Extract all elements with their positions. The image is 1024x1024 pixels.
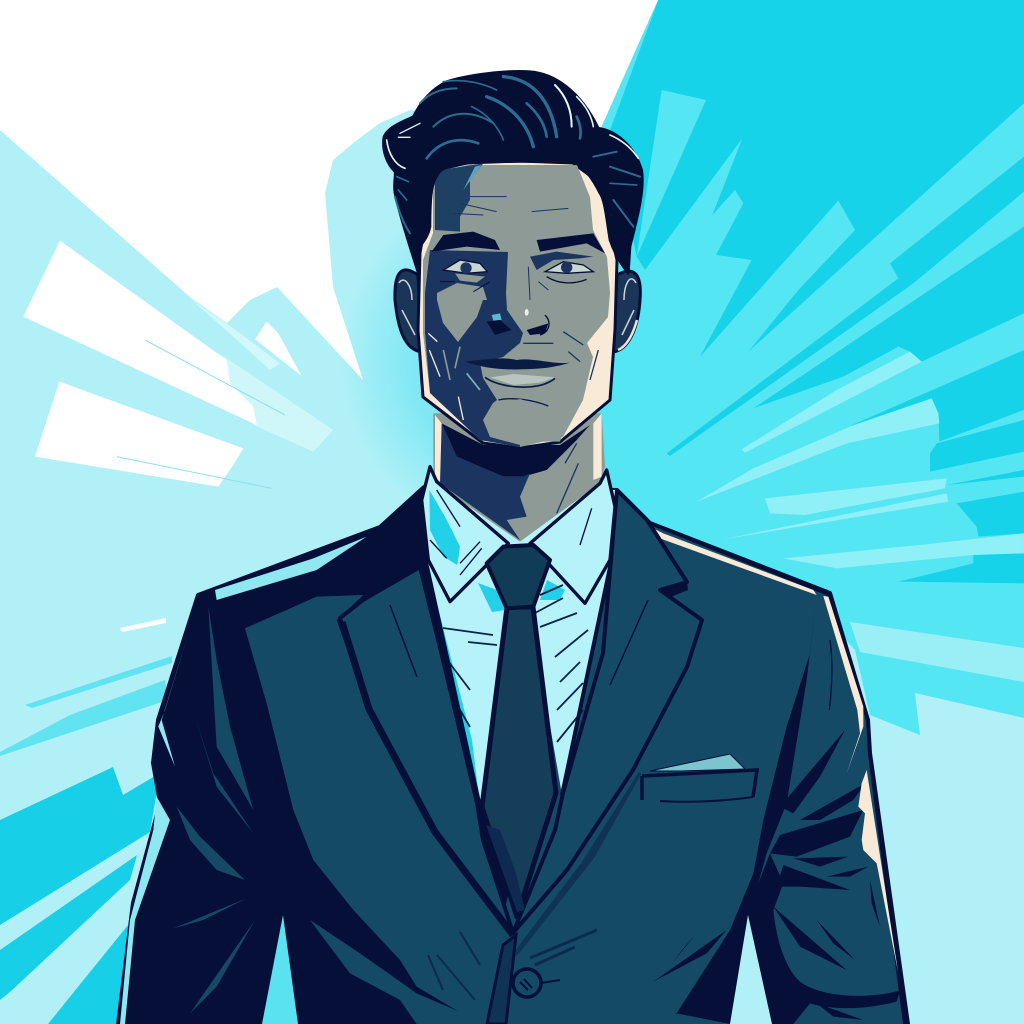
neck [433,413,605,542]
jacket front creases right [530,930,597,965]
face: forehead shadow [435,163,483,232]
right sleeve seam and folds [653,597,900,1024]
background: pale streaks, right [697,352,1024,568]
background: pale band lower right [850,622,1024,682]
lower left strip [310,920,467,1024]
cheek lines [523,332,598,380]
face: left navy shadow [425,250,523,447]
right lapel lower shadow [510,773,640,960]
right lapel notch [660,582,688,598]
jacket inner edges over shirt [424,553,613,807]
shirt wrinkles [443,585,588,742]
right eye [545,262,593,283]
background: lower left cyan wedges [0,767,160,1024]
background: white burst shards, left [23,241,333,488]
jacket base [118,487,908,1024]
nose highlight [525,309,529,316]
lower lip [490,374,555,385]
collar left [422,467,508,602]
left gap between arm and body [262,915,298,1024]
right lapel [513,490,702,933]
nose bridge [528,267,548,300]
jacket button [513,969,541,997]
left eye [443,260,487,283]
face details upper [432,197,605,316]
front seam [487,935,516,1024]
chin lit patch [484,399,567,442]
face: gray lit area [423,165,610,447]
collar right [530,470,615,603]
background: glow behind head [340,180,700,540]
button thread [520,979,560,990]
chin line [498,399,548,406]
face: eye shadow right [530,252,593,270]
tie knot [487,545,550,608]
left lapel outer thick edge [342,622,513,935]
background: white upper-left area [0,0,660,380]
shirt cyan edges [428,570,608,805]
left lapel fold line [390,605,417,677]
left cheek light streaks [443,347,460,380]
jacket right front and sleeve [500,500,903,1024]
right lapel fold [610,600,648,685]
right sleeve gap showing background [730,915,772,1024]
hair [383,71,642,273]
right shoulder and arm cream highlights [637,520,898,973]
face details lower [428,313,598,442]
left front panel [245,595,517,1024]
lower lip line [485,377,555,387]
face: left cheek lit patch [437,283,487,342]
mouth [465,358,570,369]
breast pocket square [650,754,745,771]
jacket left rim lights [120,537,367,1024]
background: left cyan streaks [0,656,172,756]
under-eye left lines [440,282,490,292]
figure: businessman [118,71,908,1024]
tie lower shadow [486,825,525,912]
jacket front creases left [428,932,480,1000]
background: thin white line [120,618,166,632]
forehead lines [453,197,568,215]
tie blade [482,607,556,917]
face: cream base [418,161,617,448]
left ear detail [399,280,415,335]
hair white highlights [387,85,638,168]
nose tip [487,313,549,335]
right ear detail [622,279,636,335]
background: mid cyan right panel [520,0,1024,735]
breast pocket [642,770,757,802]
right eyebrow [537,233,605,253]
left ear [395,270,422,352]
right ear [613,271,640,352]
sleeve highlights [173,607,255,1013]
background: deep cyan wedges, right [610,0,1024,583]
left lapel [340,567,513,933]
left eyebrow [432,232,500,252]
jacket left front and lapel in teal [173,595,517,1024]
shirt [424,490,617,805]
hair teal strands [395,77,640,233]
